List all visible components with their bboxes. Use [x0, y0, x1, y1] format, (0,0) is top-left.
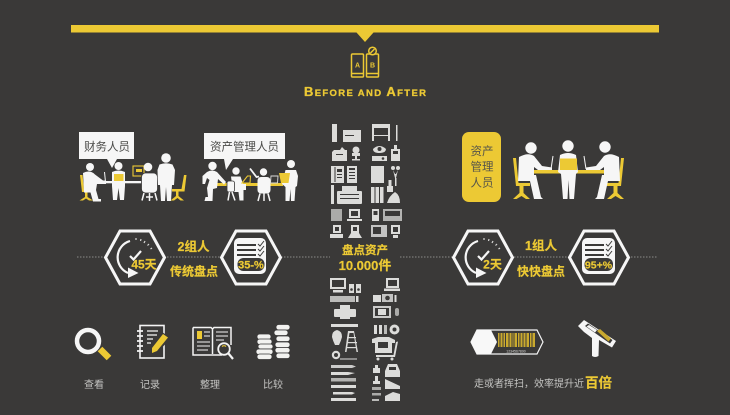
- badge: asset managers: 人员: [470, 176, 494, 190]
- hexagon: 95 percent: [570, 231, 628, 284]
- icon: open book with magnifier: [193, 328, 233, 359]
- label: compare: 比较: [263, 378, 283, 391]
- hexagon: 2 days: 2天: [483, 258, 502, 272]
- speech bubble: asset managers: 资产管理人员: [210, 140, 279, 154]
- text: 10,000 items: 10.000件: [339, 258, 391, 273]
- hexagon: 45 days: 45天: [131, 258, 157, 272]
- icon: barcode tag: [471, 330, 543, 354]
- badge: asset managers: [462, 132, 501, 202]
- text: traditional count: 传统盘点: [170, 264, 218, 278]
- label: organize: 整理: [200, 378, 220, 391]
- text: count assets: 盘点资产: [342, 243, 388, 257]
- hexagon: 35 percent: 35-%: [238, 260, 264, 272]
- label: record: 记录: [140, 379, 160, 391]
- caption: walk or wave: 走或者挥扫，效率提升近: [474, 377, 584, 390]
- office asset icons: upper group: [330, 124, 402, 238]
- people group: single team at table: [513, 140, 624, 199]
- top bar with pointer: [71, 25, 659, 42]
- icon: A/B phones: [352, 47, 378, 77]
- speech bubble: asset managers: [204, 133, 285, 170]
- icon: coin stacks: [256, 324, 290, 360]
- office asset icons: lower group: [330, 278, 400, 401]
- text: fast count: 快快盘点: [517, 264, 565, 278]
- icon: magnifier: [77, 330, 109, 358]
- speech bubble: finance staff: [79, 132, 134, 168]
- icon: handheld scanner: [578, 320, 616, 357]
- people group: asset management team: [202, 160, 298, 201]
- text: one-person team: 1组人: [525, 238, 557, 253]
- caption: walk or wave: [474, 374, 612, 390]
- text: two-person team: 2组人: [178, 239, 210, 254]
- caption: walk or wave: 百倍: [585, 374, 612, 390]
- panel: assets in the centre: [330, 124, 402, 401]
- panel: before: [77, 132, 298, 391]
- badge: asset managers: 管理: [470, 160, 494, 174]
- header banner: [71, 25, 659, 99]
- badge: asset managers: 资产: [470, 144, 494, 158]
- panel: after: [454, 132, 628, 390]
- icon: notebook and pencil: [137, 326, 171, 358]
- icon: A/B phones: A: [355, 62, 360, 70]
- hexagon: 2 days: [454, 231, 512, 284]
- hexagon: 95 percent: 95+%: [585, 260, 613, 272]
- hexagon: 35 percent: [222, 231, 280, 284]
- icon: barcode tag: 1234567890: [506, 350, 526, 354]
- hexagon: 45 days: [106, 231, 164, 284]
- speech bubble: finance staff: 财务人员: [84, 140, 130, 154]
- icon: A/B phones: B: [370, 62, 375, 70]
- people group: finance team: [80, 153, 186, 202]
- label: view: 查看: [84, 378, 104, 391]
- title: BEFORE AND AFTER: [304, 84, 426, 99]
